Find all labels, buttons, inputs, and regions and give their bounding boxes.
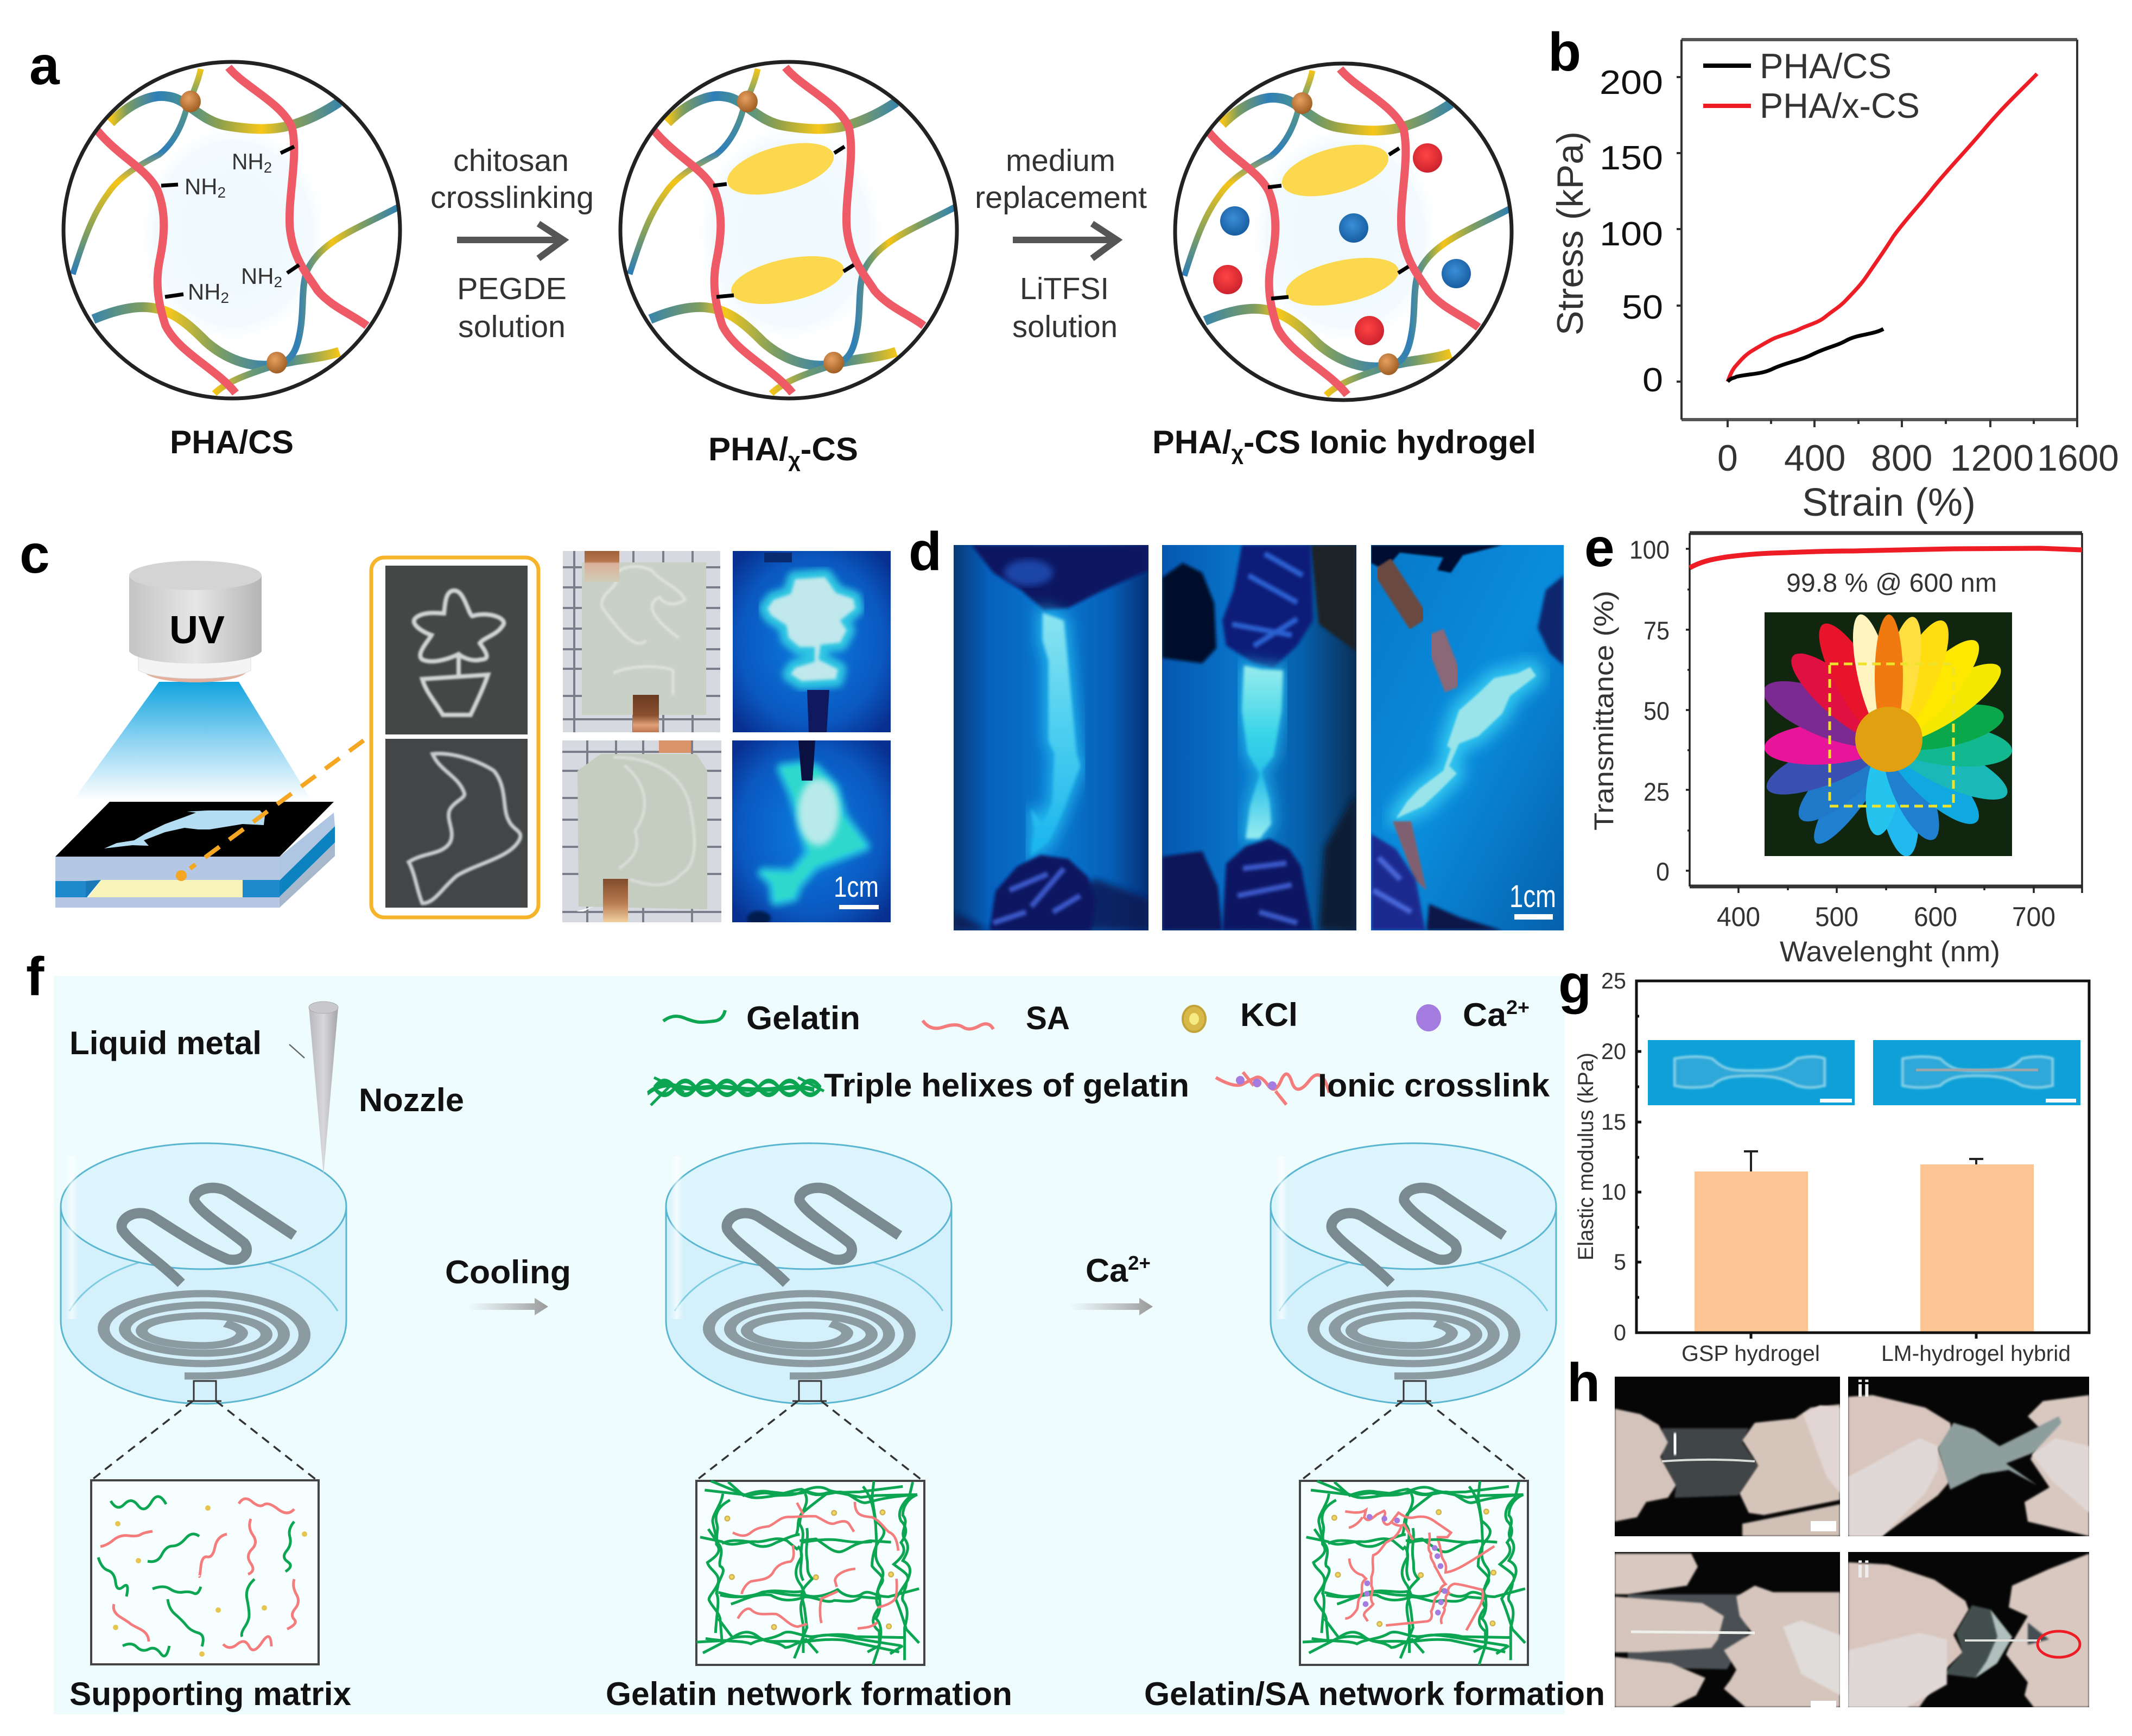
step 2 text and arrow: LiTFSI: [1020, 271, 1109, 306]
diagram: PHA/CS network circle: NH: [188, 279, 221, 305]
orange framed print photos: [371, 557, 538, 917]
legend: Triple helixes of gelatin: [824, 1067, 1189, 1104]
diagram: PHA/CS network circle: NH: [185, 174, 218, 199]
calcium step: Ca: [1086, 1252, 1127, 1289]
diagram: PHA/CS network circle: 2: [220, 289, 229, 306]
step 1 text and arrow: crosslinking: [430, 180, 594, 215]
panel b: stress strain chart: [1548, 22, 2119, 524]
step 2 text and arrow: medium: [1006, 143, 1115, 178]
x tick labels: 500: [1815, 902, 1858, 932]
legend: 2+: [1506, 996, 1530, 1018]
x labels: GSP hydrogel: [1682, 1341, 1820, 1366]
red circle marker: [2038, 1631, 2080, 1657]
nozzle: [309, 1002, 338, 1175]
x labels: LM-hydrogel hybrid: [1881, 1341, 2071, 1366]
diagram: PHA/CS network circle: 2: [217, 184, 226, 201]
y tick labels: 10: [1601, 1179, 1626, 1205]
step 1 text and arrow: [430, 143, 594, 344]
transmittance curve: [1690, 548, 2082, 568]
x tick labels: 400: [1717, 902, 1760, 932]
legend: [1703, 46, 1920, 125]
panel e: transmittance chart: [1584, 517, 2082, 968]
chart axes: [1686, 533, 2082, 893]
caption PHA/x-CS: χ: [788, 449, 801, 472]
y tick labels: 20: [1601, 1038, 1626, 1064]
UV lamp beam: [73, 682, 312, 801]
diagram: PHA/x-CS network circle: [620, 62, 957, 398]
y tick labels: 150: [1600, 140, 1663, 177]
x tick labels: 0: [1717, 438, 1738, 479]
diagram: PHA/CS network circle: [64, 62, 400, 398]
panel label e: e: [1584, 517, 1615, 578]
gel photo dolphin: [562, 740, 721, 922]
y tick labels: 50: [1622, 289, 1663, 326]
luminescent flower photo: [733, 551, 891, 732]
diagram: PHA/CS network circle: NH: [241, 263, 274, 289]
y tick labels: 0: [1642, 362, 1663, 399]
photo 2: [1162, 545, 1356, 930]
label liquid metal: Liquid metal: [69, 1025, 262, 1061]
caption PHA/x-CS: PHA/: [708, 431, 786, 467]
y tick labels: 0: [1656, 857, 1670, 886]
step 2 text and arrow: [975, 143, 1147, 344]
inset flower image: [1755, 611, 2015, 859]
step 1 text and arrow: chitosan: [453, 143, 569, 178]
legend: [648, 996, 1550, 1105]
UV lamp: [129, 561, 262, 682]
cooling step: Cooling: [445, 1254, 571, 1290]
panel label f: f: [26, 946, 45, 1007]
calcium step: [1070, 1252, 1153, 1315]
calcium step: 2+: [1128, 1252, 1151, 1274]
legend: KCl: [1240, 997, 1298, 1033]
y tick labels: 25: [1644, 777, 1670, 806]
panel d: stretched luminescent device photos: [909, 521, 1564, 930]
panel label d: d: [909, 521, 942, 582]
x tick labels: [1717, 902, 2055, 932]
photo h bottom right: ii: [1857, 1556, 1870, 1583]
photo 3: [1371, 545, 1564, 930]
x tick labels: 400: [1784, 438, 1845, 479]
photo h top left: [1615, 1377, 1840, 1536]
caption PHA/x-CS: -CS: [801, 431, 858, 467]
y tick labels: [1629, 535, 1670, 886]
inset LM dog-bone sample: [1873, 1040, 2080, 1105]
legend: SA: [1026, 1000, 1070, 1036]
legend: Gelatin: [746, 1000, 860, 1036]
gel photo flower: [563, 551, 720, 732]
diagram: PHA/CS network circle: 2: [274, 274, 282, 290]
diagram: ionic hydrogel network circle: [1175, 64, 1512, 400]
x tick labels: 800: [1871, 438, 1932, 479]
cylinder stage 2: [666, 1143, 951, 1480]
curve PHA/CS: [1728, 329, 1883, 382]
diagram: PHA/CS network circle: NH: [232, 149, 265, 174]
y tick labels: [1600, 64, 1663, 399]
photo 3: 1cm: [1509, 879, 1556, 914]
x tick labels: [1717, 438, 2119, 479]
y axis title: Elastic modulus (kPa): [1574, 1053, 1598, 1260]
y tick labels: 75: [1644, 616, 1670, 645]
caption PHA/CS: PHA/CS: [170, 424, 294, 460]
cylinder stage 3: [1271, 1143, 1556, 1480]
x tick labels: 600: [1914, 902, 1957, 932]
step 1 text and arrow: solution: [458, 309, 566, 344]
panel a: crosslinking schematic: [29, 35, 1536, 472]
y tick labels: 200: [1600, 64, 1663, 102]
panel label g: g: [1558, 954, 1591, 1015]
curve PHA/x-CS: [1728, 74, 2037, 382]
bar GSP hydrogel: [1695, 1151, 1808, 1333]
luminescent dolphin photo: [732, 740, 891, 926]
luminescent dolphin photo: 1cm: [834, 871, 879, 903]
y tick labels: 0: [1614, 1320, 1626, 1345]
panel g: elastic modulus chart: [1558, 954, 2089, 1366]
cylinder stage 1: [61, 1143, 346, 1480]
chart axes: [1677, 40, 2077, 427]
panel label b: b: [1548, 22, 1581, 83]
photo h top right: [1848, 1376, 2089, 1536]
step 1 text and arrow: PEGDE: [457, 271, 567, 306]
x axis title: Strain (%): [1802, 481, 1976, 524]
diagram: PHA/CS network circle: 2: [264, 159, 272, 176]
caption gelatin SA network: Gelatin/SA network formation: [1144, 1676, 1605, 1712]
caption ionic hydrogel: -CS Ionic hydrogel: [1243, 424, 1536, 460]
y tick labels: 100: [1600, 216, 1663, 253]
y tick labels: [1601, 968, 1626, 1345]
matrix 2 gelatin network: [696, 1481, 924, 1665]
x labels: [1682, 1341, 2071, 1366]
legend: Ionic crosslink: [1318, 1067, 1550, 1104]
step 2 text and arrow: solution: [1012, 309, 1118, 344]
dashed projection line: [176, 740, 364, 881]
panel background: [54, 976, 1565, 1714]
panel label a: a: [29, 35, 60, 96]
cooling step: [445, 1254, 571, 1315]
caption supporting matrix: Supporting matrix: [69, 1676, 351, 1712]
photo 1: [954, 545, 1149, 930]
layered stack with mask: [55, 802, 335, 908]
panel label c: c: [20, 524, 50, 585]
y tick labels: 15: [1601, 1109, 1626, 1135]
x tick labels: 700: [2012, 902, 2055, 932]
panel f: liquid metal printing schematic: [26, 946, 1605, 1714]
annotation: 99.8 % @ 600 nm: [1786, 569, 1997, 598]
caption ionic hydrogel: PHA/: [1152, 424, 1230, 460]
panel c: UV printing and luminescent patterns: [20, 524, 891, 926]
legend: Ca: [1463, 997, 1505, 1033]
y axis title: Stress (kPa): [1550, 131, 1591, 335]
matrix 3 gelatin SA network: [1300, 1481, 1528, 1665]
label nozzle: Nozzle: [359, 1082, 464, 1118]
photo h bottom left: [1615, 1552, 1840, 1707]
legend: PHA/CS: [1760, 46, 1892, 86]
photo h top right: ii: [1857, 1376, 1870, 1402]
bar LM-hydrogel hybrid: [1920, 1159, 2034, 1333]
chart axes: [1636, 981, 2089, 1339]
y axis title: Transmittance (%): [1589, 591, 1619, 831]
panel h: hand stretching photos: [1567, 1352, 2089, 1707]
x tick labels: 1200: [1950, 438, 2034, 479]
x tick labels: 1600: [2037, 438, 2119, 479]
caption ionic hydrogel: χ: [1232, 442, 1243, 465]
legend: PHA/x-CS: [1760, 86, 1920, 125]
UV lamp: UV: [169, 609, 225, 652]
panel label h: h: [1567, 1352, 1600, 1413]
x axis title: Wavelenght (nm): [1780, 936, 2000, 968]
y tick labels: 100: [1629, 535, 1670, 564]
y tick labels: 25: [1601, 968, 1626, 993]
photo h bottom right: [1848, 1552, 2089, 1707]
caption gelatin network: Gelatin network formation: [606, 1676, 1012, 1712]
step 2 text and arrow: replacement: [975, 180, 1147, 215]
inset GSP dog-bone sample: [1648, 1040, 1855, 1105]
y tick labels: 5: [1614, 1249, 1626, 1275]
matrix 1 scattered chains: [91, 1480, 319, 1664]
y tick labels: 50: [1644, 696, 1670, 725]
